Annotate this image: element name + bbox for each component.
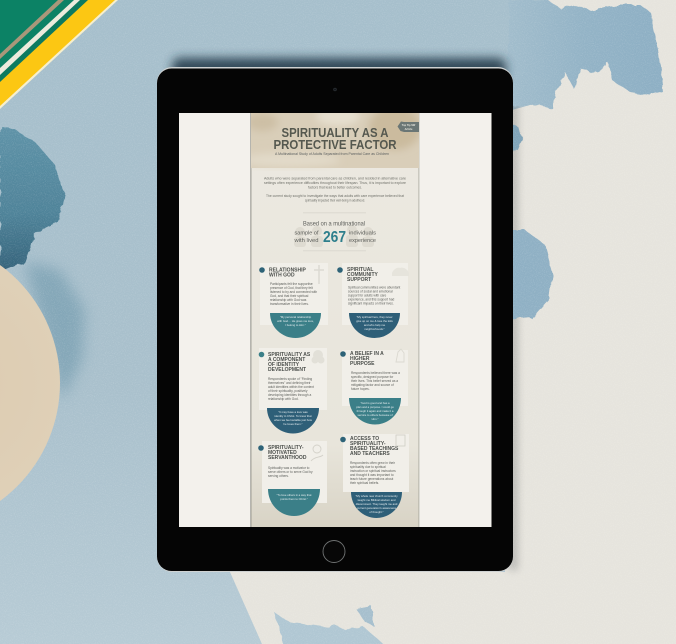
body text: teach future generations about	[350, 477, 393, 481]
heading: COMMUNITY	[347, 272, 378, 278]
quote semicircle: give up on me & love the kids	[356, 319, 393, 323]
divider	[303, 212, 366, 214]
badge: top tip: Top Tip SW	[402, 124, 416, 127]
panel: relationship with God	[259, 263, 328, 338]
body text: God, and that their spiritual	[270, 294, 309, 298]
quote semicircle: "My personal relationship	[280, 315, 312, 319]
quote semicircle: taught me Biblical wisdom and	[358, 498, 396, 502]
heading: ACCESS TO	[350, 436, 379, 442]
quote semicircle: through it again and make it a	[357, 409, 394, 413]
quote semicircle: current generation's awareness	[357, 506, 397, 510]
stat: 267 individuals: sample of	[294, 230, 319, 236]
blob top right	[505, 0, 663, 108]
home button	[323, 540, 345, 562]
quote semicircle: with God… He gives me love,	[277, 319, 314, 323]
tablet	[157, 67, 513, 572]
icon: praying figures	[312, 350, 324, 364]
panel: access to spirituality-based teachings and teachers	[340, 434, 409, 518]
intro text: spirituality impacted their well-being in adulthood.	[305, 198, 365, 202]
quote semicircle: I belong to Him."	[285, 323, 306, 327]
plate	[0, 237, 60, 529]
body text: and thought it was important to	[350, 473, 394, 477]
heading: HIGHER	[350, 356, 370, 362]
number badge 1	[259, 267, 265, 273]
number badge 5	[258, 445, 264, 451]
body text: transformative in their lives.	[270, 302, 309, 306]
heading: MOTIVATED	[268, 450, 297, 456]
header band	[251, 113, 419, 168]
heading: DEVELOPMENT	[268, 367, 306, 373]
quote semicircle	[268, 489, 320, 516]
heading: BASED TEACHINGS	[350, 446, 399, 452]
quote semicircle: "God is good and has a	[360, 401, 390, 405]
stat: 267 individuals: experience	[349, 238, 376, 244]
quote semicircle	[349, 313, 400, 338]
number badge 3	[259, 352, 264, 357]
heading: A COMPONENT	[268, 357, 305, 363]
body text: Spirituality was a motivator to	[268, 466, 310, 470]
body text: future hopes.	[351, 387, 370, 391]
camera	[334, 88, 336, 91]
body text: Respondents spoke of "Finding	[268, 377, 312, 381]
number badge 2	[337, 267, 343, 273]
icon: book with cross	[396, 435, 405, 446]
body text: sources of social and emotional	[348, 290, 393, 294]
heading: PURPOSE	[350, 361, 375, 367]
heading: WITH GOD	[269, 272, 295, 278]
body text: significant impacts on their lives.	[348, 302, 394, 306]
dark blob left	[0, 125, 65, 272]
quote semicircle: plan and a purpose. I could go	[356, 405, 394, 409]
intro text: Adults who were separated from parental care as children, and resided in alternative care	[264, 176, 406, 180]
quote semicircle: "To love others in a way that	[277, 493, 312, 497]
body text: their lives. This belief served as a	[351, 379, 398, 383]
quote semicircle: he loves them."	[283, 422, 303, 426]
intro text: The current study sought to investigate the ways that adults with care experience believed that	[266, 194, 404, 198]
quote semicircle: of thought."	[369, 510, 384, 514]
blob right lower	[510, 230, 553, 320]
subtitle: A Multinational Study of Adults Separated from Parental Care as Children	[275, 152, 389, 156]
decorative stripe: green and yellow corner	[0, 0, 118, 109]
quote semicircle: "My spiritual here, they never	[356, 315, 393, 319]
body text: Respondents believed there was a	[351, 371, 400, 375]
quote semicircle: discernment. They taught me and	[356, 502, 398, 506]
icon: cross	[314, 265, 324, 284]
heading: SPIRITUAL	[347, 267, 373, 273]
blob bottom	[274, 612, 388, 644]
body text: specific, designed purpose for	[351, 375, 394, 379]
heading: SPIRITUALITY-	[268, 445, 304, 451]
panel: a belief in a higher purpose	[340, 349, 408, 424]
body text: their spiritual beliefs.	[350, 481, 379, 485]
intro text	[264, 176, 406, 202]
body text: presence of God, that they felt	[270, 286, 313, 290]
badge: top tip	[398, 122, 419, 132]
title	[274, 125, 397, 152]
body text: instruction or spiritual instructors	[350, 469, 396, 473]
body text: developing identities through a	[268, 393, 311, 397]
panel: spirituality as a component of identity development	[259, 348, 327, 434]
badge: top tip: Article	[405, 128, 413, 131]
number badge 4	[340, 351, 346, 357]
plate shadow wash	[25, 262, 85, 400]
screen	[179, 106, 492, 527]
body text: relationship with God was	[270, 298, 307, 302]
body text: themselves" and defining their	[268, 381, 312, 385]
quote semicircle: points them to Christ."	[280, 497, 308, 501]
stat: 267 individuals: individuals	[349, 230, 376, 236]
icon: open book	[392, 268, 409, 276]
body text: support for adults with care	[348, 294, 386, 298]
number badge 6	[340, 437, 346, 442]
quote semicircle: and who help me	[364, 323, 386, 327]
quote semicircle	[270, 313, 321, 338]
body text: adult identities within the context	[268, 385, 314, 389]
stat: 267 individuals: 267	[323, 229, 346, 246]
intro text: factors that lead to better outcomes.	[308, 186, 362, 190]
heading: AND TEACHERS	[350, 451, 390, 457]
quote semicircle	[349, 398, 401, 424]
quote semicircle: neighborhoods."	[364, 327, 385, 331]
body text: serving others.	[268, 474, 289, 478]
tablet shadow	[172, 58, 506, 82]
heading: SUPPORT	[347, 277, 371, 283]
body text: of their spirituality, positively	[268, 389, 308, 393]
shadow to the right of the tablet	[508, 100, 518, 570]
stat: 267 individuals	[293, 222, 376, 247]
quote semicircle: when we feel suitable just how	[274, 418, 313, 422]
body text: mitigating factor and source of	[351, 383, 394, 387]
people silhouette	[294, 225, 374, 247]
quote semicircle: Him."	[372, 417, 378, 421]
divider	[303, 250, 366, 252]
quote semicircle	[267, 408, 319, 434]
body text: Respondents often grew in their	[350, 461, 396, 465]
infographic page	[240, 106, 421, 527]
heading: OF IDENTITY	[268, 362, 300, 368]
heading: SPIRITUALITY AS	[268, 352, 311, 358]
body text: relationship with God.	[268, 397, 299, 401]
heading: A BELIEF IN A	[350, 351, 384, 357]
body text: Participants felt the supportive	[270, 282, 313, 286]
intro text: settings often experience difficulties throughout their lifespan. Thus, it is important to explore	[264, 181, 406, 185]
quote semicircle: "It may have a love was	[278, 410, 308, 414]
heading: SERVANTHOOD	[268, 455, 307, 461]
body text: Spiritual communities were abundant	[348, 286, 400, 290]
body text: experience, and this support had	[348, 298, 394, 302]
icon: helping hand	[311, 445, 323, 461]
quote semicircle: "My whole new church community	[355, 494, 398, 498]
quote semicircle	[351, 492, 402, 518]
heading: RELATIONSHIP	[269, 268, 307, 274]
quote semicircle: service to others because of	[358, 413, 393, 417]
panel: spiritual community support	[337, 263, 409, 338]
body text: serve others or to serve God by	[268, 470, 313, 474]
blob right small	[510, 124, 522, 152]
icon: praying hands	[396, 349, 404, 362]
quote semicircle: identity in Christ. To know that	[274, 414, 312, 418]
panel: spirituality-motivated servanthood	[258, 441, 327, 516]
title: SPIRITUALITY AS A	[282, 125, 389, 140]
heading: SPIRITUALITY-	[350, 441, 386, 447]
stat: 267 individuals: with lived	[293, 238, 318, 244]
title: PROTECTIVE FACTOR	[274, 137, 397, 152]
body text: spirituality due to spiritual	[350, 465, 386, 469]
body text: listened to by and connected with	[270, 290, 317, 294]
stat: 267 individuals: Based on a multinational	[303, 222, 365, 228]
